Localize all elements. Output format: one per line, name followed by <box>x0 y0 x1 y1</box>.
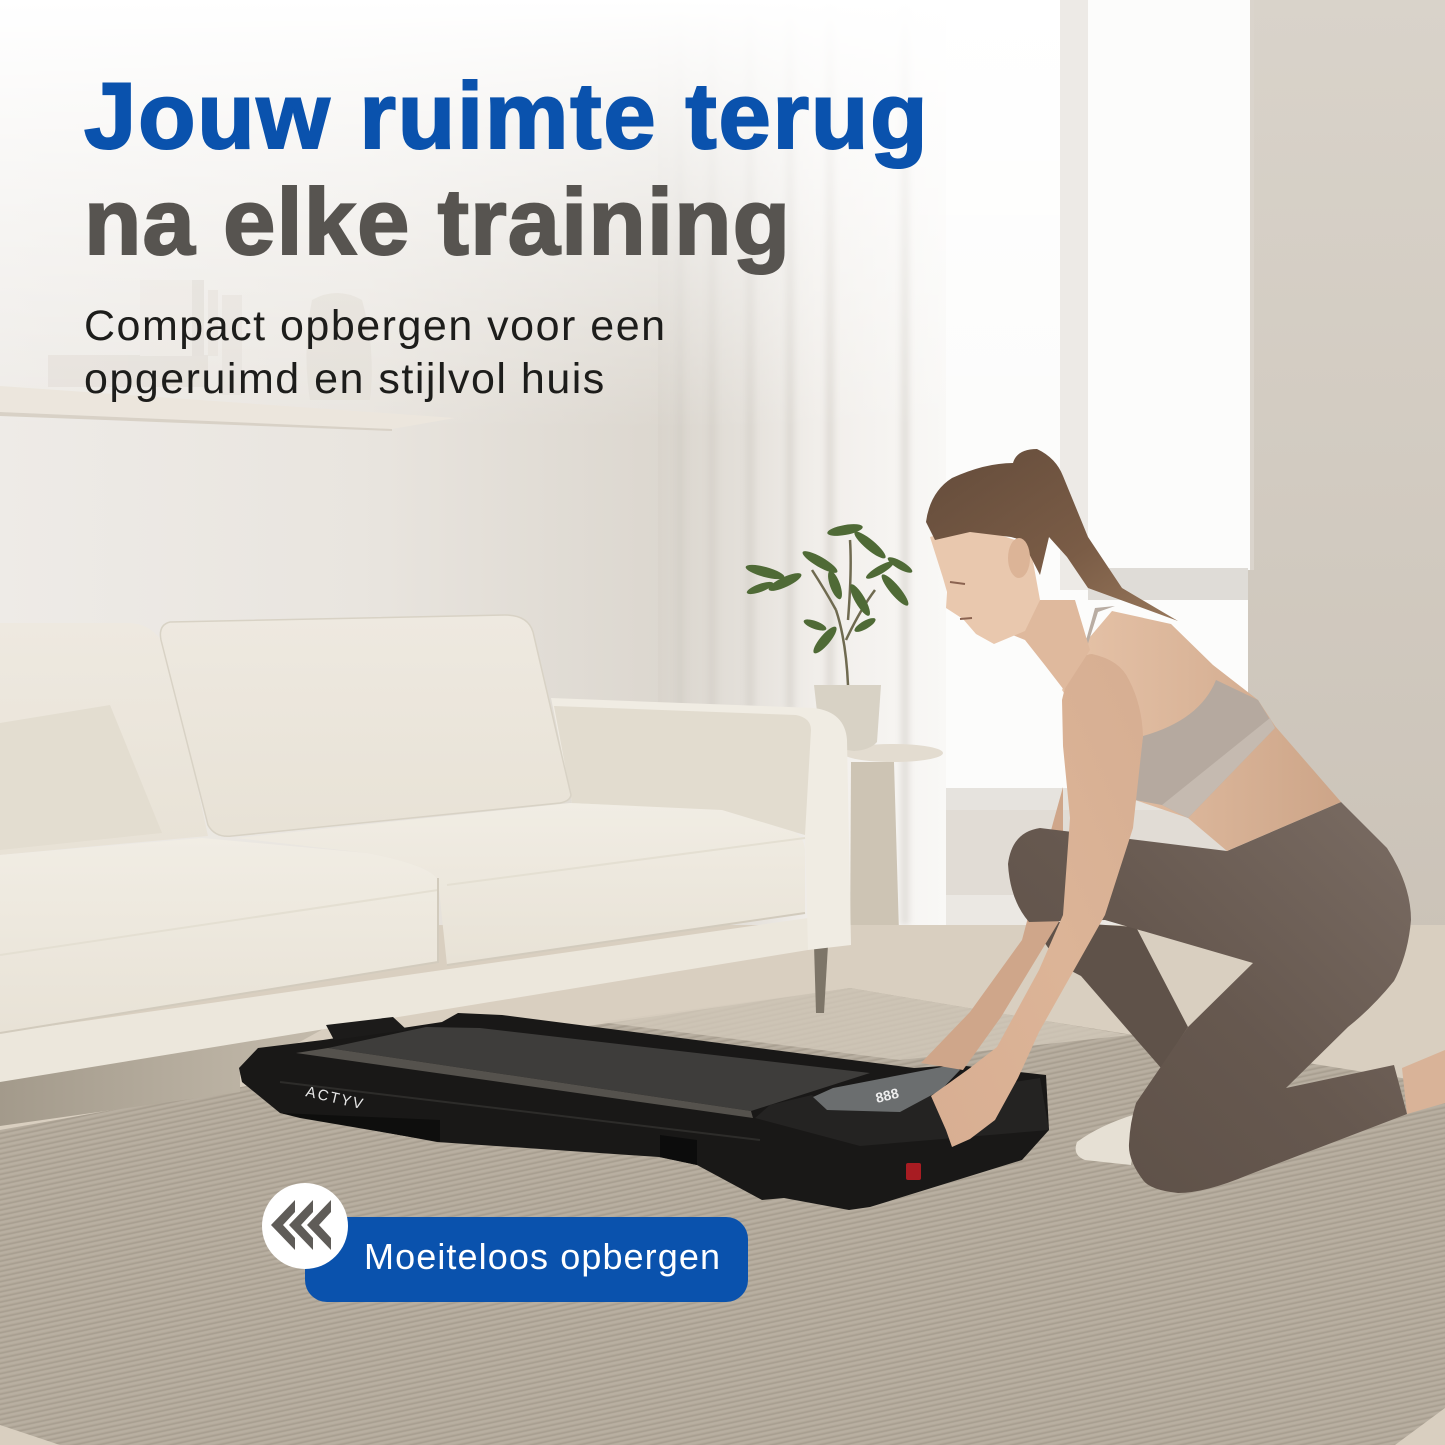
title line 2: na elke training <box>84 169 791 274</box>
left seat cushion <box>0 838 438 1033</box>
back and torso skin <box>1062 611 1341 851</box>
arm rest <box>551 698 851 950</box>
throw pillow <box>0 705 162 850</box>
right back cushion <box>160 615 571 836</box>
right wall pillar <box>1248 0 1445 975</box>
sofa <box>0 615 851 1126</box>
motor cover <box>755 1078 1049 1146</box>
title line 1: Jouw ruimte terug <box>84 63 929 168</box>
sofa leg <box>814 945 828 1013</box>
side table <box>775 744 943 967</box>
side drawer parts <box>280 1113 440 1142</box>
silver rim <box>296 1048 753 1118</box>
far arm <box>921 787 1063 1070</box>
left back cushion <box>0 623 208 855</box>
console panel <box>813 1065 960 1112</box>
rug <box>0 988 1445 1445</box>
button pill <box>305 1217 748 1302</box>
subtitle <box>84 302 667 403</box>
right seat cushion <box>236 803 805 965</box>
floor <box>0 925 1445 1445</box>
inner arm panel <box>554 706 811 835</box>
subtitle: Compact opbergen voor een <box>84 302 667 350</box>
sock shoe <box>1076 1114 1136 1165</box>
sofa underside shadow <box>0 1028 325 1126</box>
brand label: ACTYV <box>304 1083 366 1113</box>
button label: Moeiteloos opbergen <box>364 1236 721 1277</box>
console display: 888 <box>874 1085 901 1106</box>
bare foot <box>1402 1050 1445 1114</box>
ear <box>1008 538 1030 578</box>
leggings <box>1008 802 1411 1193</box>
near arm <box>931 654 1143 1147</box>
neck <box>1000 600 1090 690</box>
subtitle: opgeruimd en stijlvol huis <box>84 355 606 403</box>
red power switch <box>906 1163 921 1180</box>
hair and ponytail <box>926 449 1178 621</box>
belt deck <box>328 1027 870 1111</box>
treadmill body <box>239 1013 1049 1210</box>
top white fade overlay <box>0 0 1060 430</box>
treadmill <box>239 1013 1049 1210</box>
woman <box>921 449 1445 1193</box>
icon: triple chevrons left <box>262 1183 348 1269</box>
bra strap <box>1075 606 1115 680</box>
far lower leg <box>1029 920 1188 1068</box>
window <box>900 0 1260 927</box>
floating shelf with books and vase <box>0 280 455 431</box>
face <box>930 525 1040 644</box>
hinge piece <box>326 1017 407 1040</box>
eye and lip <box>950 582 972 619</box>
sheer curtain <box>658 0 946 925</box>
sports bra <box>1135 680 1275 818</box>
sofa base <box>0 918 808 1082</box>
plant in pot <box>744 522 914 751</box>
